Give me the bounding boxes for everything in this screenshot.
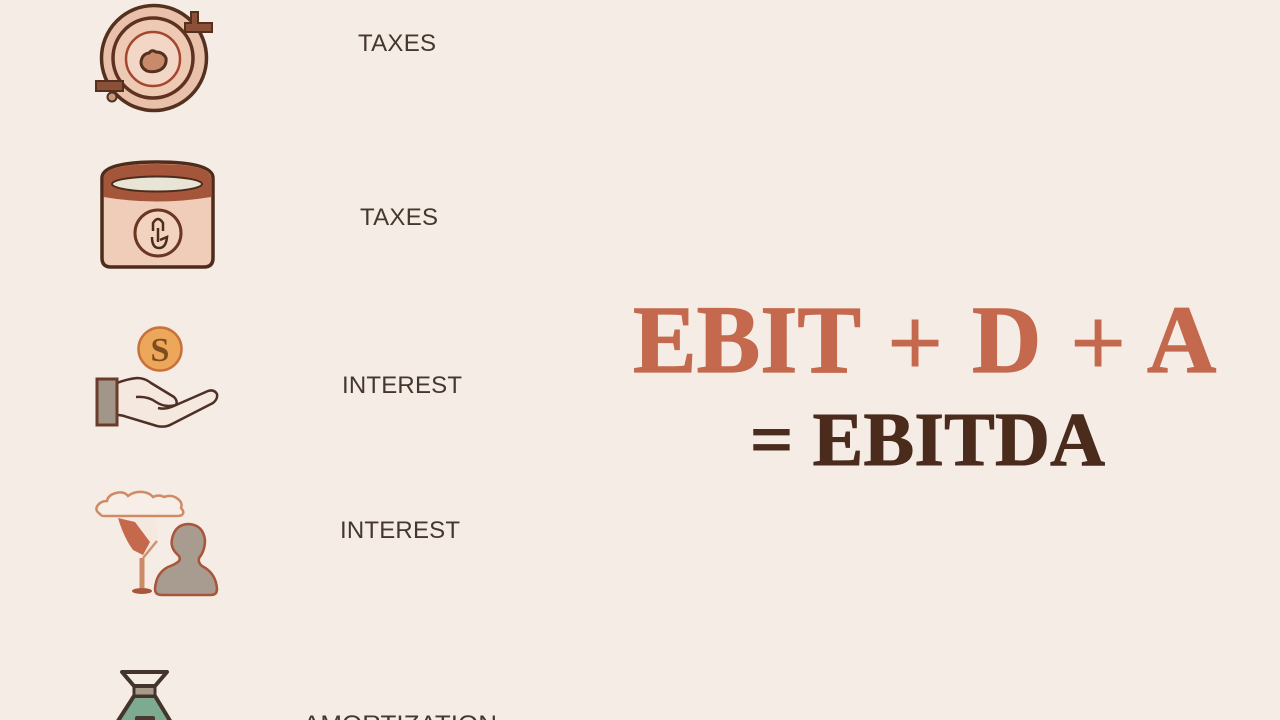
formula: EBIT + D + A: +: [888, 289, 942, 396]
icon: target rings: [96, 6, 212, 110]
formula: EBIT + D + A: D: [972, 286, 1041, 393]
label: taxes 2: TAXES: [360, 204, 438, 231]
icon: hand with coin: S: [151, 332, 169, 369]
label: taxes 1: TAXES: [358, 30, 436, 57]
icon: flask: [116, 672, 172, 720]
icon: jar with symbol: [102, 162, 213, 267]
icon: hand with coin: [97, 328, 217, 427]
label: interest 1: INTEREST: [342, 372, 462, 399]
formula: EBIT + D + A: +: [1071, 289, 1125, 396]
formula: EBIT + D + A: EBIT: [633, 286, 861, 393]
formula result: = EBITDA: = EBITDA: [750, 398, 1105, 482]
formula: EBIT + D + A: [633, 286, 1216, 396]
icon: cloud, glass and person: [96, 492, 217, 595]
label: interest 2: INTEREST: [340, 517, 460, 544]
formula: EBIT + D + A: A: [1147, 286, 1216, 393]
